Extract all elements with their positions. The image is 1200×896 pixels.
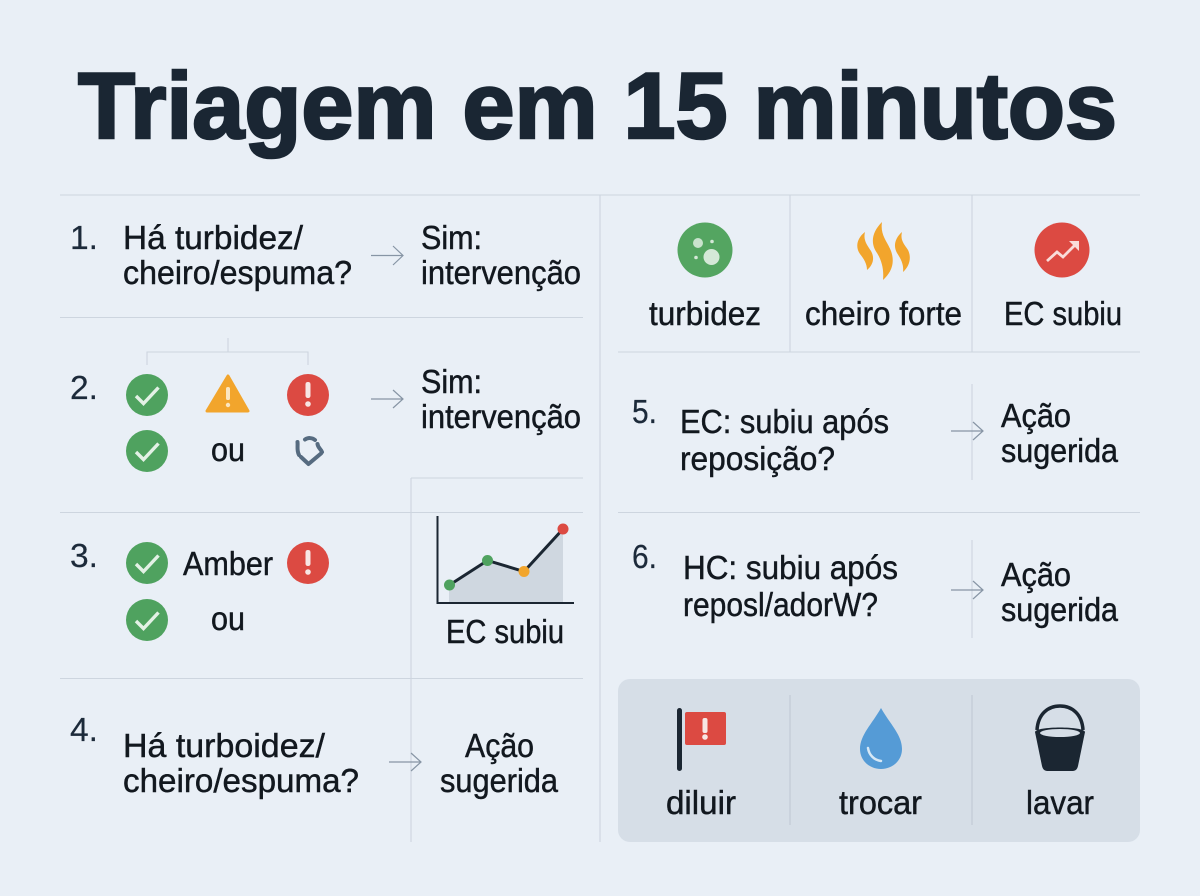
icon: rising trend bbox=[1034, 222, 1090, 278]
step 5: Ação bbox=[1001, 397, 1071, 434]
step 4: sugerida bbox=[440, 762, 559, 799]
step 2: ou bbox=[211, 431, 245, 468]
icon: water drop bbox=[860, 708, 902, 769]
step 4 bbox=[70, 711, 559, 799]
icon: turbidity bbox=[678, 222, 732, 278]
step 5: EC: subiu após bbox=[680, 403, 889, 440]
panel: sinais: turbidez bbox=[649, 295, 761, 332]
icon: alert bbox=[287, 374, 329, 416]
step 1: intervenção bbox=[421, 254, 581, 291]
step 1: 1. bbox=[70, 219, 98, 256]
step 4: 4. bbox=[70, 711, 98, 748]
connector bbox=[147, 338, 308, 365]
step 5: reposição? bbox=[680, 440, 835, 477]
step 1: Sim: bbox=[421, 219, 482, 256]
icon: odour waves bbox=[857, 222, 910, 280]
step 6: sugerida bbox=[1001, 591, 1119, 628]
step 5: sugerida bbox=[1001, 432, 1119, 469]
step 6: 6. bbox=[632, 538, 657, 575]
step 2: intervenção bbox=[421, 398, 581, 435]
icon: check bbox=[126, 542, 168, 584]
icon: check bbox=[126, 374, 168, 416]
step 3: Amber bbox=[183, 545, 273, 582]
step 6: HC: subiu após bbox=[683, 549, 898, 586]
panel: sinais bbox=[649, 222, 1122, 332]
icon: alert bbox=[287, 542, 329, 584]
icon: red flag bbox=[677, 708, 726, 771]
panel: sinais: EC subiu bbox=[1004, 295, 1122, 332]
arrow bbox=[371, 390, 403, 408]
step 4: Ação bbox=[465, 727, 534, 764]
chart: EC subiu bbox=[438, 516, 574, 650]
step 2: 2. bbox=[70, 369, 98, 406]
step 6 bbox=[632, 538, 1119, 628]
step 5: 5. bbox=[632, 393, 657, 430]
title: Triagem em 15 minutos bbox=[78, 53, 1117, 158]
chart: EC subiu: EC subiu bbox=[446, 613, 564, 650]
step 1 bbox=[70, 219, 581, 291]
step 1: cheiro/espuma? bbox=[123, 254, 352, 291]
arrow bbox=[389, 753, 421, 771]
step 2: Sim: bbox=[421, 363, 482, 400]
step 4: cheiro/espuma? bbox=[123, 762, 359, 799]
step 4: Há turboidez/ bbox=[123, 727, 326, 764]
step 5 bbox=[632, 393, 1119, 477]
step 3: ou bbox=[211, 600, 245, 637]
panel: ações: diluir bbox=[666, 784, 736, 821]
arrow bbox=[951, 581, 983, 599]
step 3 bbox=[70, 537, 329, 641]
step 1: Há turbidez/ bbox=[123, 219, 304, 256]
panel: ações: trocar bbox=[839, 784, 922, 821]
icon: ring bbox=[298, 438, 322, 464]
step 6: reposl/adorW? bbox=[683, 586, 878, 623]
step 3: 3. bbox=[70, 537, 98, 574]
icon: bucket bbox=[1035, 706, 1085, 771]
step 2 bbox=[70, 338, 581, 472]
icon: warning triangle bbox=[207, 376, 248, 411]
panel: ações: lavar bbox=[1026, 784, 1094, 821]
arrow bbox=[951, 422, 983, 440]
step 6: Ação bbox=[1001, 556, 1071, 593]
icon: check bbox=[126, 430, 168, 472]
panel: ações bbox=[618, 679, 1140, 842]
icon: check bbox=[126, 599, 168, 641]
panel: sinais: cheiro forte bbox=[805, 295, 962, 332]
arrow bbox=[371, 246, 403, 265]
